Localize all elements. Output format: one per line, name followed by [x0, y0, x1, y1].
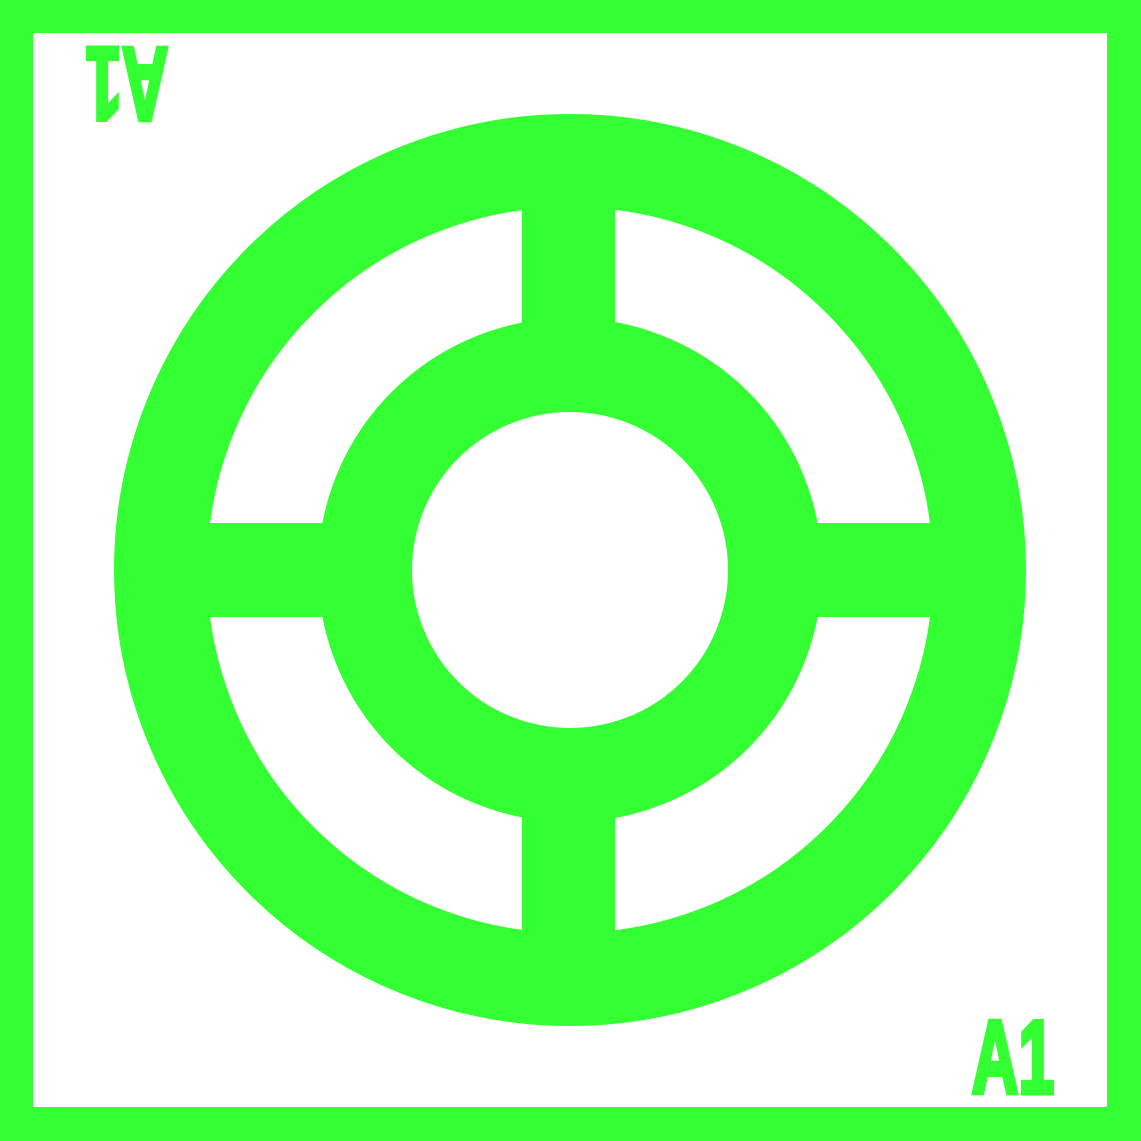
inner ring — [365, 365, 775, 775]
label top-left: rotated A1: A1 — [86, 25, 168, 141]
connector bars — [190, 190, 950, 950]
label bottom-right: A1: A1 — [972, 1000, 1054, 1116]
outer ring — [160, 160, 980, 980]
